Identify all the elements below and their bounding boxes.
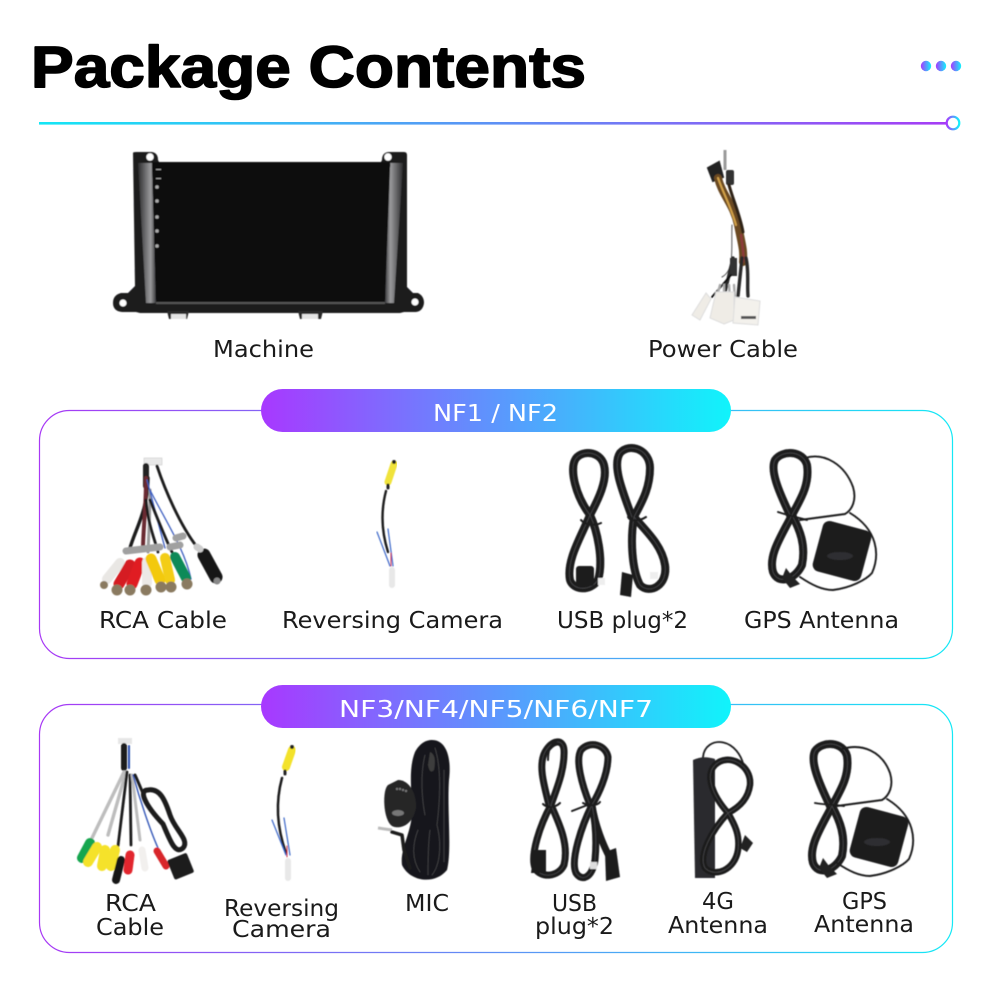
label: Reversing Camera: Reversing Camera: [282, 608, 503, 634]
label: USB plug*2: [535, 891, 614, 940]
label: USB plug*2: USB: [552, 891, 597, 917]
panel: NF1 / NF2: [40, 389, 952, 658]
label: 4G Antenna: [668, 889, 768, 939]
pill heading: NF1 / NF2: NF1 / NF2: [433, 401, 558, 427]
reversing camera cable: [377, 460, 396, 585]
label: USB plug*2: plug*2: [535, 914, 614, 940]
label: Reversing Camera: [224, 896, 339, 943]
pill heading: NF3/NF4/NF5/NF6/NF7: [261, 685, 731, 728]
label: USB plug*2: USB plug*2: [557, 608, 688, 634]
icon: three dots: [921, 61, 961, 71]
label: Power Cable: Power Cable: [648, 337, 798, 363]
header rule with end circle: [39, 117, 959, 129]
machine: head unit: [113, 152, 424, 319]
label: GPS Antenna: GPS Antenna: [744, 608, 899, 634]
label: RCA Cable: RCA: [105, 891, 156, 917]
GPS antenna: [772, 453, 876, 590]
USB plugs, second version: [531, 742, 620, 881]
USB plugs: [569, 448, 665, 597]
label: RCA Cable: [96, 891, 164, 941]
microphone: [378, 740, 450, 880]
label: Machine: Machine: [213, 337, 314, 363]
label: 4G Antenna: Antenna: [668, 913, 768, 939]
label: GPS Antenna: Antenna: [814, 912, 914, 938]
RCA cable, second version: [82, 738, 194, 880]
power cable: [692, 150, 760, 325]
pill heading: NF3/NF4/NF5/NF6/NF7: NF3/NF4/NF5/NF6/NF7: [339, 697, 653, 723]
label: MIC: MIC: [405, 891, 449, 917]
label: Reversing Camera: Camera: [232, 917, 331, 943]
label: Reversing Camera: Reversing: [224, 896, 339, 922]
label: GPS Antenna: GPS: [842, 889, 887, 915]
label: RCA Cable: Cable: [96, 915, 164, 941]
RCA cable: [100, 458, 220, 596]
4G antenna: [693, 742, 753, 878]
pill heading: NF1 / NF2: [261, 389, 731, 432]
GPS antenna, second version: [812, 744, 913, 878]
label: RCA Cable: RCA Cable: [99, 608, 227, 634]
reversing camera cable, second version: [272, 745, 294, 878]
label: GPS Antenna: [814, 889, 914, 938]
panel: NF3/NF4/NF5/NF6/NF7: [40, 685, 952, 952]
label: 4G Antenna: 4G: [702, 889, 734, 915]
title: Package Contents: [31, 35, 586, 100]
